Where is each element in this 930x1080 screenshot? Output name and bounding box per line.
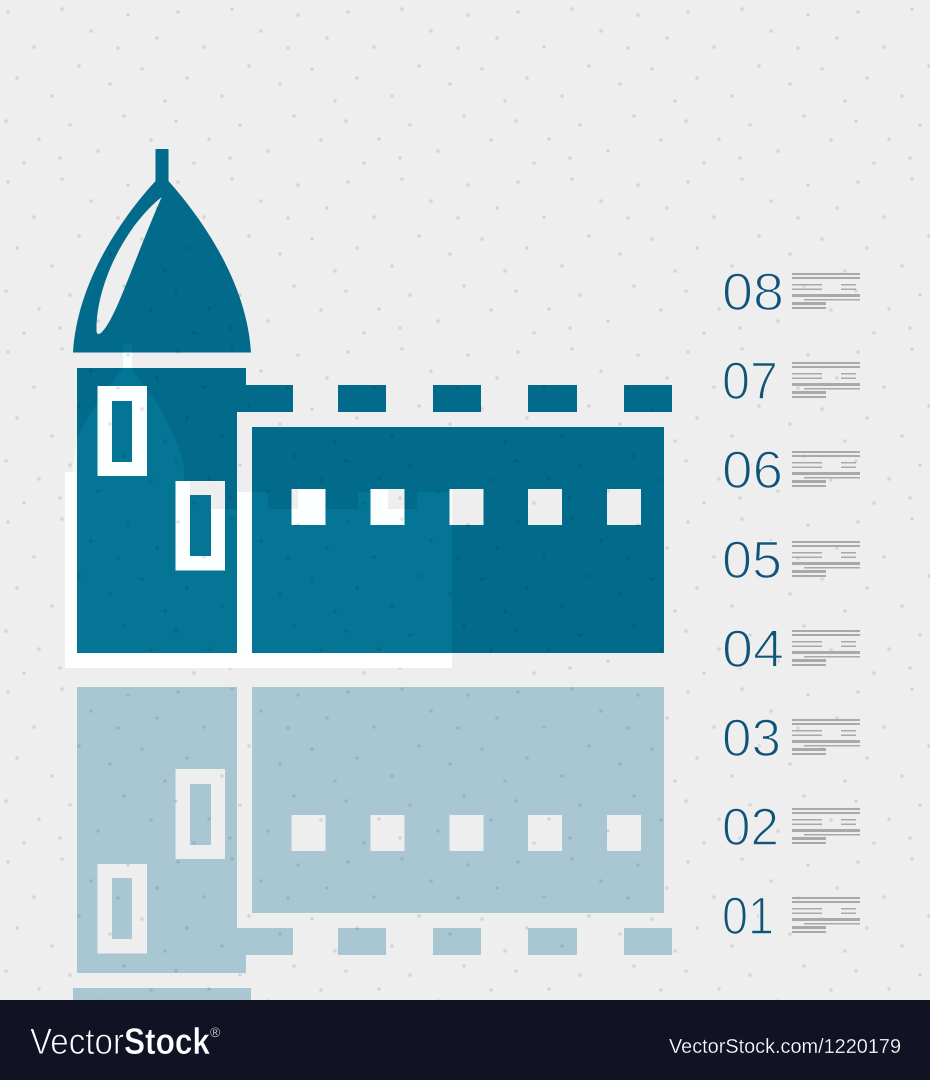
legend item 04: 04 <box>722 620 784 679</box>
legend item 08 <box>722 263 860 322</box>
reflected dome base <box>73 988 251 1000</box>
footer logo light part: Vector <box>30 1021 124 1062</box>
registered mark: ® <box>210 1024 221 1040</box>
legend item 06 <box>722 441 860 500</box>
legend item 07 <box>722 352 860 411</box>
reflected tower <box>77 687 293 973</box>
tower window lower <box>176 481 225 570</box>
tower window upper <box>98 386 147 476</box>
legend item 02 <box>722 798 860 857</box>
reflection spill outside tower <box>72 437 77 472</box>
light reflection on wall <box>237 492 452 653</box>
dome highlight <box>96 197 162 334</box>
white glow frame around castle <box>65 472 452 668</box>
legend item 08: 08 <box>722 263 784 322</box>
legend item 07: 07 <box>722 352 778 411</box>
reflected finial on dome <box>123 343 132 352</box>
footer image id: VectorStock.com/1220179 <box>669 1036 901 1058</box>
legend list <box>722 263 860 946</box>
reflected tower windows <box>98 769 225 954</box>
legend item 05: 05 <box>722 531 782 590</box>
reflected battlements <box>338 928 672 955</box>
castle wall <box>252 427 664 653</box>
wall windows <box>292 489 641 525</box>
castle: pale reflection <box>73 687 672 1000</box>
legend item 04 <box>722 620 860 679</box>
castle: main teal <box>72 149 672 653</box>
gap between tower and wall <box>237 412 252 492</box>
light reflection on tower <box>77 368 237 653</box>
tower body with first merlon <box>77 368 293 653</box>
legend item 06: 06 <box>722 441 783 500</box>
legend item 03: 03 <box>722 709 781 768</box>
icon: tower dome with spire <box>73 149 251 352</box>
footer band <box>0 1000 930 1080</box>
legend item 02: 02 <box>722 798 779 857</box>
legend item 01 <box>722 887 860 946</box>
reflected wall windows <box>292 815 641 851</box>
footer logo bold part: Stock <box>124 1021 210 1062</box>
reflected wall <box>252 687 664 913</box>
battlements <box>338 385 672 412</box>
legend item 05 <box>722 531 860 590</box>
legend item 03 <box>722 709 860 768</box>
reflected finial in gap <box>123 352 132 368</box>
white glow divider <box>237 492 252 653</box>
legend item 01: 01 <box>722 887 774 946</box>
